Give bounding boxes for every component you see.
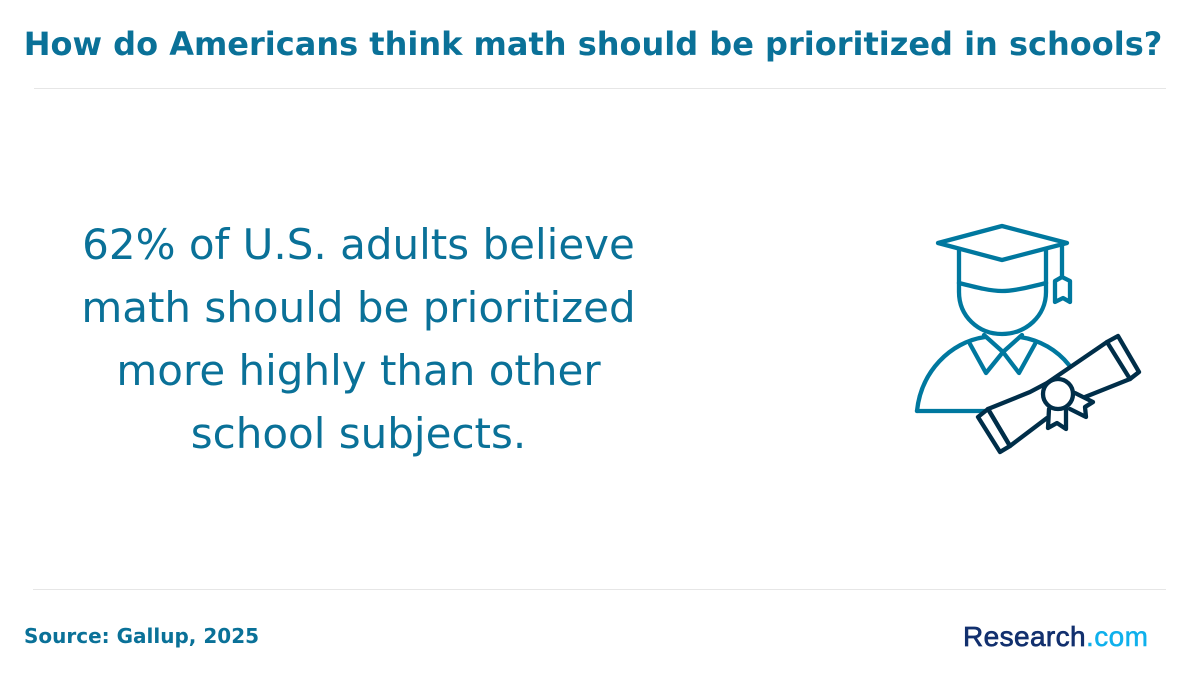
- main statement: math should be prioritized: [81, 283, 636, 332]
- title: How do Americans think math should be prioritized in schools?: [24, 25, 1162, 63]
- graduate figure: [917, 226, 1070, 411]
- diploma scroll: [978, 336, 1139, 452]
- main statement: 62% of U.S. adults believe: [82, 220, 635, 269]
- source: Source: Gallup, 2025: [24, 624, 259, 648]
- icon: graduate with diploma: [914, 224, 1142, 454]
- main statement: [81, 220, 636, 458]
- main statement: more highly than other: [116, 346, 601, 395]
- main statement: school subjects.: [191, 409, 526, 458]
- logo: Research.com: Research.com: [963, 621, 1148, 652]
